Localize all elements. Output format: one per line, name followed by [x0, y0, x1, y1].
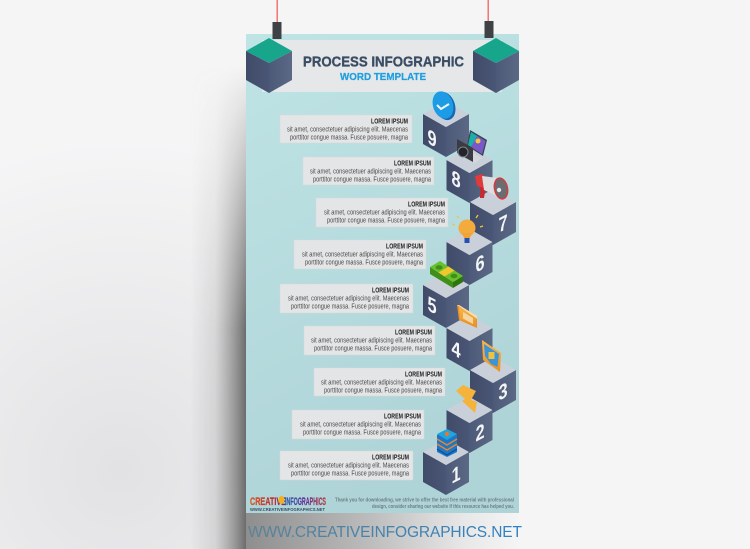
step 8 cube: 8: [451, 166, 461, 194]
step 7 label: [316, 198, 448, 227]
hanging clips: [272, 21, 494, 39]
step 7 cube: 7: [498, 210, 508, 238]
step 3 cube: 3: [498, 378, 508, 406]
poster panel: [246, 34, 519, 513]
step 1 label: [280, 451, 413, 480]
icon: light bulb: [452, 215, 483, 243]
footer thank-you note: Thank you for downloading, we strive to offer the best free material with professional: [335, 498, 514, 504]
title: [303, 54, 464, 83]
step 2 cube: [446, 397, 492, 453]
step 6 label: LOREM IPSUM: [386, 244, 423, 250]
hanging strings: [276, 0, 489, 23]
step 4 label: LOREM IPSUM: [395, 330, 432, 336]
step 4 label: sit amet, consectetuer adipiscing elit. Maecenas: [311, 338, 432, 344]
step 8 label: sit amet, consectetuer adipiscing elit. Maecenas: [310, 168, 431, 176]
step 9 cube: 9: [427, 125, 437, 153]
step 5 label: porttitor congue massa. Fusce posuere, magna: [291, 304, 409, 310]
step 6 label: sit amet, consectetuer adipiscing elit. Maecenas: [302, 252, 423, 258]
step 8 label: LOREM IPSUM: [394, 160, 431, 168]
icon: banknotes: [430, 261, 463, 288]
step 7 label: porttitor congue massa. Fusce posuere, magna: [327, 218, 445, 224]
step 1 label: LOREM IPSUM: [372, 454, 409, 462]
footer logo: WWW.CREATIVEINFOGRAPHICS.NET: [250, 507, 325, 512]
step 3 label: LOREM IPSUM: [405, 372, 442, 378]
step 8 label: porttitor congue massa. Fusce posuere, magna: [313, 176, 431, 184]
step 1 cube: [423, 439, 469, 495]
step 2 label: sit amet, consectetuer adipiscing elit. Maecenas: [300, 422, 421, 428]
step 3 cube: [470, 357, 516, 413]
step 9 label: LOREM IPSUM: [371, 118, 408, 126]
step 5 cube: 5: [427, 292, 437, 320]
icon: camera and picture screen: [457, 130, 487, 163]
poster side shadow: [199, 80, 246, 549]
step 1 cube: 1: [451, 461, 461, 489]
step 5 label: [280, 284, 413, 313]
icon: server stack: [437, 429, 457, 457]
step 5 label: LOREM IPSUM: [372, 288, 409, 294]
icon: security shield: [482, 340, 501, 372]
step 9 label: porttitor congue massa. Fusce posuere, magna: [290, 134, 408, 142]
icon: mail badge: [457, 305, 477, 328]
step 6 cube: 6: [475, 250, 485, 278]
header band: [262, 40, 502, 92]
website url: WWW.CREATIVEINFOGRAPHICS.NET: [248, 524, 523, 541]
step 8 cube: [446, 147, 492, 203]
header cube left: [246, 38, 292, 93]
step 9 label: sit amet, consectetuer adipiscing elit. Maecenas: [287, 126, 408, 134]
step 4 label: [304, 326, 435, 355]
icon: lightning bolt: [456, 385, 477, 413]
step 3 label: sit amet, consectetuer adipiscing elit. Maecenas: [321, 380, 442, 386]
infographic mockup scene: [0, 0, 522, 549]
step 3 label: porttitor congue massa. Fusce posuere, magna: [324, 388, 442, 394]
step 2 label: porttitor congue massa. Fusce posuere, magna: [303, 430, 421, 436]
step 7 label: sit amet, consectetuer adipiscing elit. Maecenas: [324, 210, 445, 216]
step 4 label: porttitor congue massa. Fusce posuere, magna: [314, 346, 432, 352]
step 8 label: [303, 157, 434, 185]
footer logo: [250, 496, 326, 512]
step 6 cube: [446, 229, 492, 285]
step 2 label: [292, 410, 424, 439]
step 6 label: porttitor congue massa. Fusce posuere, magna: [305, 260, 423, 266]
footer thank-you note: design, consider sharing our website if this resource has helped you.: [372, 504, 514, 510]
poster floor shadow: [246, 513, 520, 549]
step 4 cube: 4: [451, 336, 461, 364]
footer thank-you note: [335, 498, 514, 510]
step 6 label: [294, 240, 426, 269]
icon: megaphone: [475, 174, 510, 200]
step 9 cube: [423, 101, 469, 157]
step 1 label: porttitor congue massa. Fusce posuere, magna: [291, 470, 409, 478]
infographic mockup scene: INFOGRAPHICS: [285, 496, 326, 508]
step 5 cube: [423, 272, 469, 328]
step 9 label: [280, 115, 412, 143]
step 3 label: [314, 368, 445, 396]
icon: check badge: [429, 89, 459, 123]
title: WORD TEMPLATE: [340, 71, 426, 83]
step 2 label: LOREM IPSUM: [384, 414, 421, 420]
header cube right: [473, 38, 519, 93]
step 2 cube: 2: [475, 419, 485, 447]
step 7 cube: [470, 189, 516, 245]
footer logo: CREATIVE: [250, 496, 286, 508]
title: PROCESS INFOGRAPHIC: [303, 54, 464, 70]
step 7 label: LOREM IPSUM: [408, 202, 445, 208]
step 4 cube: [446, 315, 492, 371]
step 1 label: sit amet, consectetuer adipiscing elit. Maecenas: [288, 462, 409, 470]
step 5 label: sit amet, consectetuer adipiscing elit. Maecenas: [288, 296, 409, 302]
